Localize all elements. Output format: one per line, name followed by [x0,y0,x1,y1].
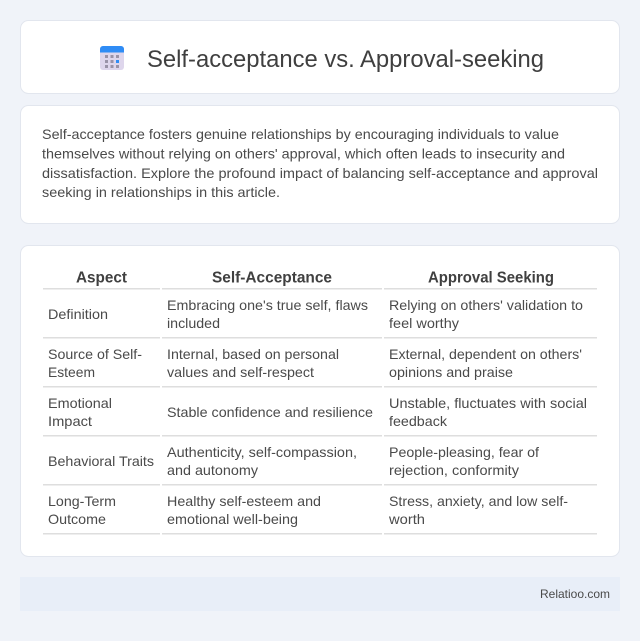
row: emotional impact: Unstable, fluctuates with social [389,395,587,411]
row: behavioral traits [48,444,539,478]
row: emotional impact: feedback [389,413,448,429]
row: long-term outcome: Healthy self-esteem and [167,493,321,509]
panel: introduction: themselves without relying on others' approval, which often leads to insecurity and [42,146,565,162]
row: source of self-esteem: opinions and praise [389,364,513,380]
row: long-term outcome [48,493,568,527]
row: emotional impact [48,395,587,429]
row: source of self-esteem: Source of Self- [48,346,142,362]
row: long-term outcome: worth [388,511,425,527]
row: source of self-esteem: Esteem [48,364,95,380]
row: behavioral traits: People-pleasing, fear of [389,444,539,460]
row: definition: Embracing one's true self, flaws [167,297,368,313]
row: behavioral traits: Authenticity, self-compassion, [167,444,357,460]
panel: introduction: seeking in relationships in this article. [42,184,280,200]
row: behavioral traits: and autonomy [167,462,258,478]
title: Self-acceptance vs. Approval-seeking [147,46,544,73]
row: definition [48,297,583,331]
row: source of self-esteem [48,346,582,380]
row: long-term outcome: Outcome [48,511,106,527]
row: source of self-esteem: values and self-respect [167,364,314,380]
row: long-term outcome: Stress, anxiety, and low self- [389,493,568,509]
footer: Relatioo.com [540,587,610,601]
table header: Aspect [76,270,127,286]
row: emotional impact: Stable confidence and resilience [167,404,373,420]
table header: Self-Acceptance [212,270,332,286]
panel: introduction [20,106,620,224]
table header [76,270,554,286]
row: source of self-esteem: Internal, based on personal [167,346,339,362]
row: definition: included [167,315,220,331]
row: emotional impact: Impact [48,413,92,429]
panel: comparison table [20,246,620,556]
panel: header [20,20,620,94]
panel: introduction: Self-acceptance fosters genuine relationships by encouraging individuals to value [42,126,559,142]
row: source of self-esteem: External, dependent on others' [389,346,582,362]
row: emotional impact: Emotional [48,395,112,411]
row: definition: Definition [48,306,108,322]
footer [20,577,620,611]
icon: calendar [100,46,124,70]
panel: introduction: dissatisfaction. Explore the profound impact of balancing self-acceptance and approval [42,165,598,181]
row: definition: feel worthy [389,315,459,331]
row: long-term outcome: Long-Term [48,493,116,509]
row: behavioral traits: Behavioral Traits [48,453,154,469]
table header: Approval Seeking [428,270,554,286]
row: behavioral traits: rejection, conformity [389,462,519,478]
row: long-term outcome: emotional well-being [167,511,298,527]
row: definition: Relying on others' validation to [389,297,583,313]
